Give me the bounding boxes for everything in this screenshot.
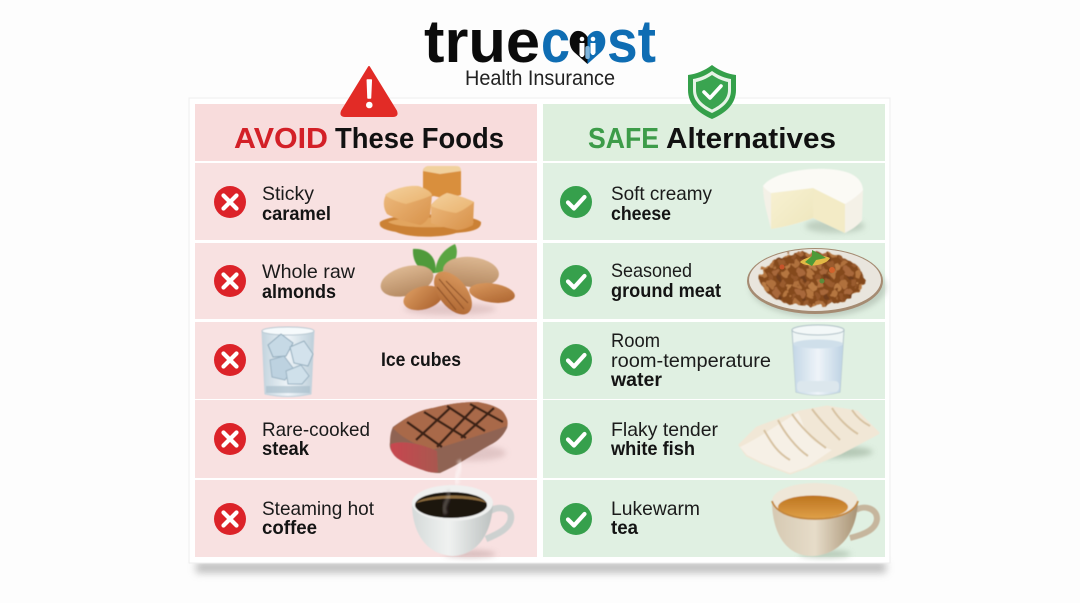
label: sticky caramel: caramel xyxy=(262,203,331,225)
label: room-temperature water: water xyxy=(610,369,662,391)
row: room-temperature water xyxy=(543,322,885,399)
label: steaming hot coffee xyxy=(262,498,375,539)
row: lukewarm tea xyxy=(543,480,885,558)
label: soft creamy cheese: Soft creamy xyxy=(611,183,712,205)
label: whole raw almonds: almonds xyxy=(262,281,336,303)
label: room-temperature water xyxy=(610,330,771,391)
image: tea cup xyxy=(772,483,877,558)
image: glass of ice xyxy=(262,327,314,396)
heading: AVOID These Foods: AVOID xyxy=(234,123,328,155)
label: lukewarm tea: tea xyxy=(611,517,638,539)
icon: red cross xyxy=(214,344,246,376)
icon: red cross xyxy=(214,503,246,535)
icon: red cross xyxy=(214,265,246,297)
logo letter: c: c xyxy=(541,8,570,75)
label: soft creamy cheese xyxy=(611,183,712,225)
icon: warning triangle xyxy=(341,67,397,116)
heading: SAFE Alternatives: Alternatives xyxy=(666,123,836,155)
row: soft creamy cheese xyxy=(543,163,885,240)
label: room-temperature water: Room xyxy=(611,330,660,352)
safe header background xyxy=(543,104,885,161)
icon: red cross xyxy=(214,186,246,218)
label: whole raw almonds: Whole raw xyxy=(262,261,356,283)
label: steaming hot coffee: Steaming hot xyxy=(262,498,375,520)
logo letters: st: st xyxy=(607,8,656,75)
icon: green check xyxy=(560,423,592,455)
image: white fish fillet xyxy=(740,407,878,473)
label: lukewarm tea: Lukewarm xyxy=(611,498,700,520)
heading: SAFE Alternatives: SAFE xyxy=(588,123,659,155)
image: almonds xyxy=(377,244,516,321)
logo subtitle: Health Insurance xyxy=(465,67,615,90)
image: coffee cup xyxy=(412,460,511,558)
image: plate of ground meat xyxy=(747,248,886,317)
logo word: true: true xyxy=(424,8,540,75)
label: sticky caramel: Sticky xyxy=(262,183,314,205)
logo heart with family xyxy=(570,31,605,64)
row: ice cubes xyxy=(195,322,537,399)
label: seasoned ground meat xyxy=(611,260,721,302)
row: sticky caramel xyxy=(195,163,537,240)
label: soft creamy cheese: cheese xyxy=(611,203,671,225)
row: seasoned ground meat xyxy=(543,243,886,319)
icon: green check xyxy=(560,503,592,535)
row: steaming hot coffee xyxy=(195,460,537,558)
label: ice cubes: Ice cubes xyxy=(381,349,461,371)
avoid header background xyxy=(195,104,537,161)
row: rare-cooked steak xyxy=(195,400,537,478)
icon: red cross xyxy=(214,423,246,455)
heading: AVOID These Foods xyxy=(234,123,504,155)
label: flaky tender white fish xyxy=(610,419,718,460)
label: flaky tender white fish: Flaky tender xyxy=(611,419,718,441)
label: sticky caramel xyxy=(262,183,331,225)
icon: green check xyxy=(560,344,592,376)
label: steaming hot coffee: coffee xyxy=(262,517,317,539)
label: rare-cooked steak: Rare-cooked xyxy=(262,419,370,441)
panel: avoid foods xyxy=(195,104,537,558)
row: whole raw almonds xyxy=(195,243,537,321)
image: caramel cubes xyxy=(380,166,481,237)
image: glass of water xyxy=(792,325,844,395)
panel: safe alternatives xyxy=(543,104,886,558)
label: rare-cooked steak xyxy=(262,419,370,460)
label: seasoned ground meat: Seasoned xyxy=(611,260,692,282)
label: whole raw almonds xyxy=(262,261,356,303)
label: rare-cooked steak: steak xyxy=(262,438,309,460)
logo: truecost Health Insurance xyxy=(424,8,656,90)
icon: green check xyxy=(560,186,592,218)
row: flaky tender white fish xyxy=(543,400,885,478)
icon: green shield xyxy=(688,65,736,119)
card shadow xyxy=(196,562,886,573)
label: seasoned ground meat: ground meat xyxy=(611,280,721,302)
heading: SAFE Alternatives xyxy=(588,123,836,155)
image: brie cheese xyxy=(763,169,865,233)
label: flaky tender white fish: white fish xyxy=(610,438,695,460)
heading: AVOID These Foods: These Foods xyxy=(335,123,504,155)
icon: green check xyxy=(560,265,592,297)
image: steak xyxy=(390,402,508,473)
label: lukewarm tea xyxy=(611,498,700,539)
label: room-temperature water: room-temperature xyxy=(611,350,771,372)
card xyxy=(189,98,890,563)
